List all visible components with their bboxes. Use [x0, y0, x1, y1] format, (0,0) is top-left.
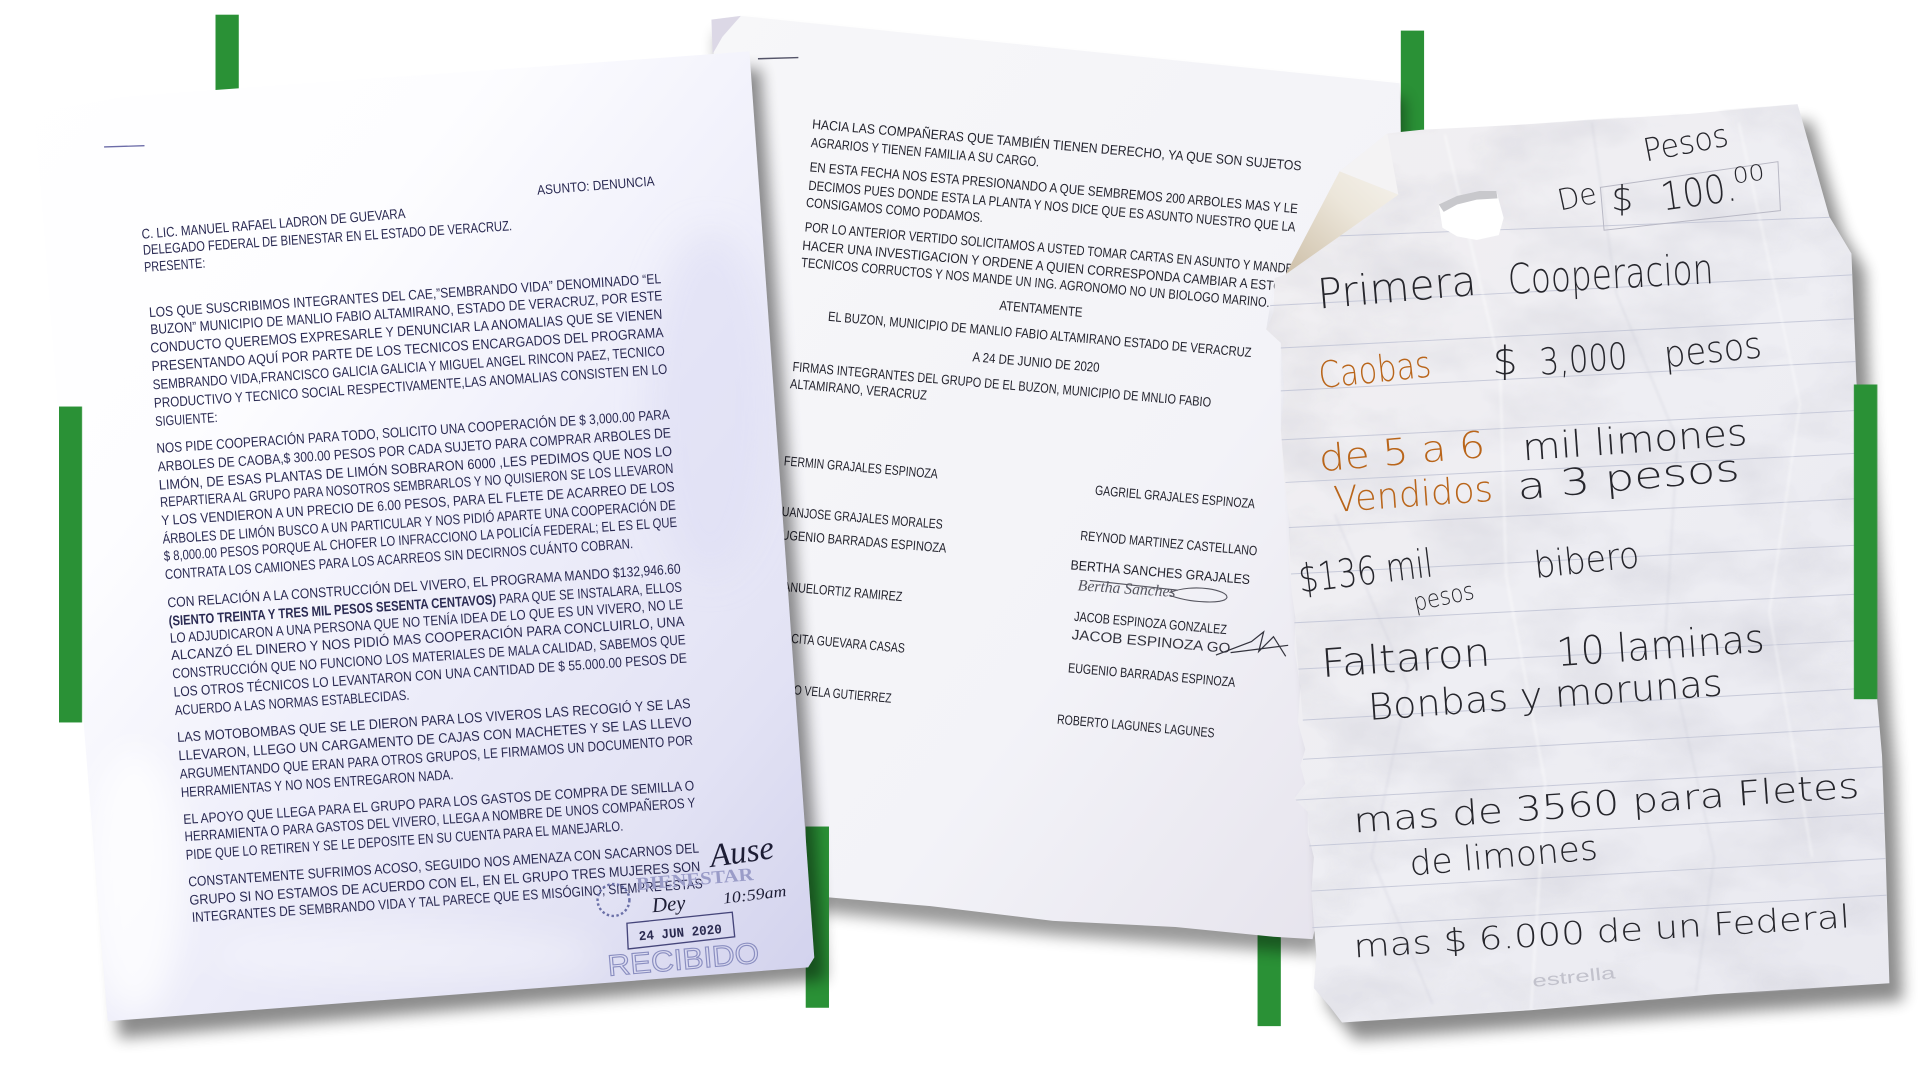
letter body: EN ESTA FECHA NOS ESTA PRESIONANDO A QUE SEMBREMOS 200 ARBOLES MAS Y LE [809, 159, 1298, 216]
addressee: PRESENTE: [144, 255, 206, 275]
signature names: O VELA GUTIERREZ [793, 682, 892, 706]
paragraph 2: Y LOS VENDIERON A UN PRECIO DE 6.00 PESOS, PARA EL FLETE DE ACARREO DE LOS [161, 478, 675, 528]
letter body: HACER UNA INVESTIGACION Y ORDENE A QUIEN CORRESPONDA CAMBIAR A ESTOS [802, 238, 1291, 295]
signature names: BERTHA SANCHES GRAJALES [1070, 557, 1251, 587]
handwritten text: mas $ 6.000 de un Federal [1352, 897, 1851, 966]
letter body: ATENTAMENTE [999, 298, 1083, 320]
handwritten text: 100. [1658, 165, 1739, 221]
letter body: CONSIGAMOS COMO PODAMOS. [805, 195, 984, 225]
paragraph 2: ÁRBOLES DE LIMÓN BUSCO A UN PARTICULAR Y NOS PIDIÓ APARTE UNA COOPERACIÓN DE [162, 497, 676, 547]
paragraph 2: $ 8,000.00 PESOS PORQUE AL CHOFER LO INFRACCIONO LA POLICÍA FEDERAL; EL ES EL QUE [163, 514, 677, 564]
handwritten text: de 5 a 6 [1317, 423, 1487, 480]
letter body: ALTAMIRANO, VERACRUZ [790, 376, 927, 403]
handwritten text: bibero [1532, 533, 1641, 587]
green bar: top centre [1401, 31, 1424, 141]
sheet: torn notebook paper [1266, 104, 1889, 1022]
paragraph 1 [149, 270, 668, 429]
letter body: FIRMAS INTEGRANTES DEL GRUPO DE EL BUZON, MUNICIPIO DE MNLIO FABIO [792, 359, 1212, 410]
handwritten text: de limones [1408, 828, 1599, 884]
addressee: DELEGADO FEDERAL DE BIENESTAR EN EL ESTADO DE VERACRUZ. [142, 217, 512, 258]
handwritten note on stamp [650, 830, 787, 917]
crumple texture [1261, 98, 1898, 1029]
paragraph 2: REPARTIERA AL GRUPO PARA NOSOTROS SEMBRARLOS Y NO QUISIERON SE LOS LLEVARON [160, 460, 674, 510]
handwritten text: pesos [1662, 323, 1764, 376]
letter body: DECIMOS PUES DONDE ESTA LA PLANTA Y NOS DICE QUE ES ASUNTO NUESTRO QUE LA [808, 178, 1296, 235]
handwritten text: pesos [1411, 576, 1477, 617]
letter body: POR LO ANTERIOR VERTIDO SOLICITAMOS A USTED TOMAR CARTAS EN ASUNTO Y MANDE [804, 219, 1294, 276]
received stamp: RECIBIDO [606, 937, 760, 983]
notebook brand mark: estrella [1531, 962, 1617, 991]
paragraph 2 [156, 406, 677, 582]
paragraph 5: EL APOYO QUE LLEGA PARA EL GRUPO PARA LOS GASTOS DE COMPRA DE SEMILLA O [183, 777, 695, 827]
addressee [141, 205, 512, 275]
paragraph 2: NOS PIDE COOPERACIÓN PARA TODO, SOLICITO UNA COOPERACIÓN DE $ 3,000.00 PARA [156, 406, 671, 456]
paragraph 5: PIDE QUE LO RETIREN Y SE LE DEPOSITE EN SU CUENTA PARA EL MANEJARLO. [185, 818, 624, 863]
handwritten note on stamp: Ause [706, 830, 776, 875]
paragraph 2: ARBOLES DE CAOBA,$ 300.00 PESOS POR CADA SUJETO PARA COMPRAR ARBOLES DE [157, 424, 671, 474]
paragraph 1: PRODUCTIVO Y TECNICO SOCIAL RESPECTIVAMENTE,LAS ANOMALIAS CONSISTEN EN LO [153, 361, 668, 411]
paragraph 3: CON RELACIÓN A LA CONSTRUCCIÓN DEL VIVERO, EL PROGRAMA MANDO $132,946.60 [167, 560, 681, 610]
letter body [790, 117, 1302, 410]
paragraph 2: LIMÓN, DE ESAS PLANTAS DE LIMÓN SOBRARON 6000 ,LES PEDIMOS QUE NOS LO [158, 443, 673, 493]
staple mark [104, 146, 144, 147]
panel: typed letter page one [34, 51, 825, 1038]
subject line: ASUNTO: DENUNCIA [537, 174, 655, 198]
paragraph 1: SIGUIENTE: [155, 409, 218, 429]
paper mottling [102, 252, 745, 1002]
handwritten text: Pesos [1640, 116, 1731, 169]
handwritten text: Vendidos [1332, 469, 1494, 521]
signature names: ROBERTO LAGUNES LAGUNES [1056, 712, 1215, 740]
handwritten text: $ [1611, 180, 1633, 220]
handwritten text: 3,000 [1538, 335, 1629, 384]
letter body: HACIA LAS COMPAÑERAS QUE TAMBIÉN TIENEN DERECHO, YA QUE SON SUJETOS [812, 117, 1302, 174]
paragraph 5: HERRAMIENTA O PARA GASTOS DEL VIVERO, LLEGA A NOMBRE DE UNOS COMPAÑEROS Y [184, 794, 696, 844]
handwritten text: Cooperacion [1507, 244, 1715, 304]
signature names: FERMIN GRAJALES ESPINOZA [783, 453, 938, 481]
paragraph 4: HERRAMIENTAS Y NO NOS ENTREGARON NADA. [180, 766, 454, 800]
signature: Bertha [1077, 577, 1227, 602]
signature names: JACOB ESPINOZA GONZALEZ [1074, 609, 1227, 637]
sheet: page two [711, 16, 1408, 939]
paragraph 1: BUZON” MUNICIPIO DE MANLIO FABIO ALTAMIRANO, ESTADO DE VERACRUZ, POR ESTE [150, 287, 663, 337]
handwritten text: mas de 3560 para Fletes [1352, 766, 1861, 842]
handwritten text: Primera [1315, 256, 1478, 319]
paragraph 4: ARGUMENTANDO QUE ERAN PARA OTROS GRUPOS, LE FIRMAMOS UN DOCUMENTO POR [179, 732, 693, 782]
handwritten text: De [1554, 176, 1600, 217]
letter body: EL BUZON, MUNICIPIO DE MANLIO FABIO ALTAMIRANO ESTADO DE VERACRUZ [827, 309, 1252, 360]
paragraph 3: ALCANZÓ EL DINERO Y NOS PIDIÓ MAS COOPERACIÓN PARA CONCLUIRLO, UNA [171, 613, 685, 663]
signature: Jacob: JACOB ESPINOZA GO [1071, 626, 1231, 656]
handwritten note on stamp: 10:59am [722, 883, 787, 908]
paragraph 5 [183, 777, 696, 863]
paragraph 3 [167, 560, 687, 718]
handwritten text: Bonbas y morunas [1367, 661, 1724, 729]
signature names: EUGENIO BARRADAS ESPINOZA [1067, 660, 1236, 690]
handwritten text: $136 mil [1296, 541, 1435, 603]
staple mark [758, 58, 798, 59]
paragraph 6 [188, 840, 703, 925]
handwritten text [1296, 116, 1861, 966]
handwritten text: mil limones [1521, 411, 1749, 469]
folded corner [711, 16, 741, 54]
ruled lines [1261, 214, 1910, 931]
paragraph 3: LO ADJUDICARON A UNA PERSONA QUE NO TENÍA IDEA DE LO QUE ES UN VIVERO, NO LE [169, 596, 684, 646]
signature: Jacob [1071, 626, 1288, 656]
received stamp: 24 JUN 2020 [638, 923, 723, 945]
signature names: EUGENIO BARRADAS ESPINOZA [774, 527, 947, 556]
paragraph 2: CONTRATA LOS CAMIONES PARA LOS ACARREOS SIN DECIRNOS CUÁNTO COBRAN. [164, 535, 633, 582]
folded corner [1286, 133, 1398, 274]
received stamp: BIENESTAR [635, 864, 755, 894]
handwritten text: Caobas [1316, 343, 1433, 397]
green bar: left [59, 407, 82, 722]
handwritten text: Faltaron [1320, 630, 1492, 687]
handwritten text: $ [1493, 340, 1518, 385]
signature: Bertha: Bertha Sanches [1077, 577, 1176, 601]
paragraph 4: LLEVARON, LLEGO UN CARGAMENTO DE CAJAS CON MACHETES Y SE LAS LLEVO [178, 713, 692, 763]
green bar: right [1854, 384, 1877, 699]
green bar: top left [216, 15, 239, 100]
paragraph 1: PRESENTANDO AQUÍ POR PARTE DE LOS TECNICOS ENCARGADOS DEL PROGRAMA [151, 324, 665, 374]
panel: typed letter page two [711, 16, 1413, 954]
handwritten text: a 3 pesos [1515, 446, 1741, 509]
letter body: A 24 DE JUNIO DE 2020 [972, 349, 1100, 375]
handwritten text: 00 [1731, 160, 1766, 190]
paragraph 6: CONSTANTEMENTE SUFRIMOS ACOSO, SEGUIDO NOS AMENAZA CON SACARNOS DEL [188, 840, 700, 890]
signature names: MANUELORTIZ RAMIREZ [774, 578, 903, 604]
torn hole [1439, 191, 1504, 240]
letter body: AGRARIOS Y TIENEN FAMILIA A SU CARGO. [810, 135, 1040, 169]
paragraph 3: LOS OTROS TÉCNICOS LO LEVANTARON CON UNA CANTIDAD DE $ 55.000.00 PESOS DE [173, 650, 687, 700]
paragraph 3: (SIENTO TREINTA Y TRES MIL PESOS SESENTA CENTAVOS) PARA QUE SE INSTALARA, ELLOS [168, 579, 682, 629]
addressee: C. LIC. MANUEL RAFAEL LADRON DE GUEVARA [141, 205, 407, 242]
paragraph 1: CONDUCTO QUEREMOS EXPRESARLE Y DENUNCIAR LA ANOMALIAS QUE SE VIENEN [150, 306, 663, 356]
handwritten text: 10 laminas [1555, 617, 1766, 676]
paragraph 6: INTEGRANTES DE SEMBRANDO VIDA Y TAL PARECE QUE ES MISÓGINO; SIEMPRE ESTAS [191, 875, 703, 925]
paragraph 4 [177, 695, 693, 800]
sheet: page one [34, 51, 814, 1021]
signature names: REYNOD MARTINEZ CASTELLANO [1080, 528, 1258, 558]
letter body: TECNICOS CORRUCTOS Y NOS MANDE UN ING. AGRONOMO NO UN BIOLOGO MARINO. [801, 255, 1270, 310]
signature names: JUANJOSE GRAJALES MORALES [776, 504, 943, 532]
signature names: CITA GUEVARA CASAS [791, 631, 906, 656]
paper creases [1481, 220, 1807, 916]
paragraph 3: CONSTRUCCIÓN QUE NO FUNCIONO LOS MATERIALES DE MALA CALIDAD, SABEMOS QUE [172, 631, 686, 681]
panel: handwritten note [1261, 98, 1910, 1040]
paragraph 1: LOS QUE SUSCRIBIMOS INTEGRANTES DEL CAE,”SEMBRANDO VIDA” DENOMINADO “EL [149, 270, 662, 320]
handwritten note on stamp: Dey [650, 890, 687, 917]
price box [1600, 162, 1780, 230]
green bar: bottom centre [1258, 931, 1281, 1026]
paragraph 1: SEMBRANDO VIDA,FRANCISCO GALICIA GALICIA Y MIGUEL ANGEL RINCON PAEZ, TECNICO [152, 342, 665, 392]
paragraph 4: LAS MOTOBOMBAS QUE SE LE DIERON PARA LOS VIVEROS LAS RECOGIÓ Y SE LAS [177, 695, 691, 745]
received stamp [598, 864, 760, 983]
signature names: GAGRIEL GRAJALES ESPINOZA [1094, 483, 1256, 511]
paragraph 3: ACUERDO A LAS NORMAS ESTABLECIDAS. [174, 687, 410, 718]
paragraph 6: GRUPO SI NO ESTAMOS DE ACUERDO CON EL, EN EL GRUPO TRES MUJERES SON [189, 858, 701, 908]
signature names [774, 453, 1258, 740]
green bar: bottom of first page [806, 827, 829, 1008]
